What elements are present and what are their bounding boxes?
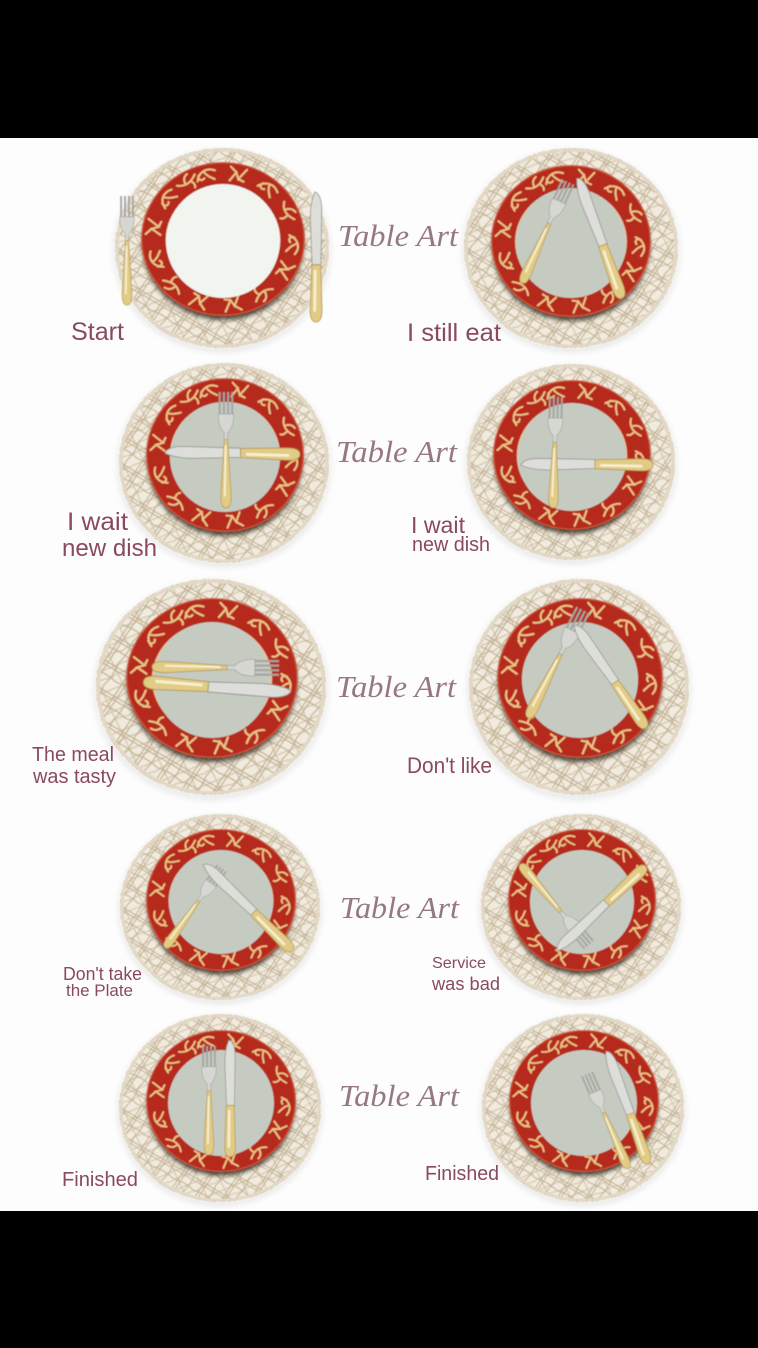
label: I wait new dish, left <box>62 508 157 562</box>
logo: Table Art: Table Art <box>339 1078 460 1113</box>
place setting: the meal was tasty <box>94 579 328 800</box>
logo: Table Art: Table Art <box>336 669 457 704</box>
label: Service was bad: Service <box>432 955 486 972</box>
label: Start: Start <box>71 318 124 346</box>
label: I wait new dish, right: I wait <box>411 512 466 538</box>
label: I wait new dish, right: new dish <box>412 534 490 556</box>
place setting: finished, right <box>480 1014 686 1207</box>
label: I wait new dish, left: I wait <box>67 508 128 536</box>
place setting: I wait new dish, left <box>117 363 331 568</box>
label: I wait new dish, left: new dish <box>62 535 157 562</box>
place setting: start <box>113 148 331 353</box>
label: Don't take the Plate: Don't take <box>63 964 142 984</box>
label: Don't take the Plate: the Plate <box>66 981 133 1000</box>
place setting: finished, left <box>117 1014 323 1207</box>
logo: Table Art: Table Art <box>338 218 459 253</box>
label: Service was bad <box>431 955 500 994</box>
place setting: don't take the plate <box>118 814 322 1005</box>
label: Finished, left: Finished <box>62 1169 138 1191</box>
label: The meal was tasty: was tasty <box>32 766 116 788</box>
label: Service was bad: was bad <box>431 974 500 994</box>
label: I wait new dish, right <box>411 512 490 556</box>
place setting: I still eat <box>462 148 680 353</box>
label: Don't like: Don't like <box>407 753 492 778</box>
logo: Table Art: Table Art <box>340 890 460 925</box>
place setting: service was bad <box>479 814 683 1005</box>
label: Finished, right: Finished <box>425 1163 499 1185</box>
logo: Table Art: Table Art <box>336 434 458 469</box>
place setting: don't like <box>467 579 691 800</box>
label: The meal was tasty: The meal <box>32 744 114 766</box>
label: I still eat: I still eat <box>407 319 501 347</box>
place setting: I wait new dish, right <box>465 364 677 565</box>
white page area <box>0 138 758 1211</box>
label: The meal was tasty <box>32 744 116 788</box>
label: Don't take the Plate <box>63 964 142 1000</box>
